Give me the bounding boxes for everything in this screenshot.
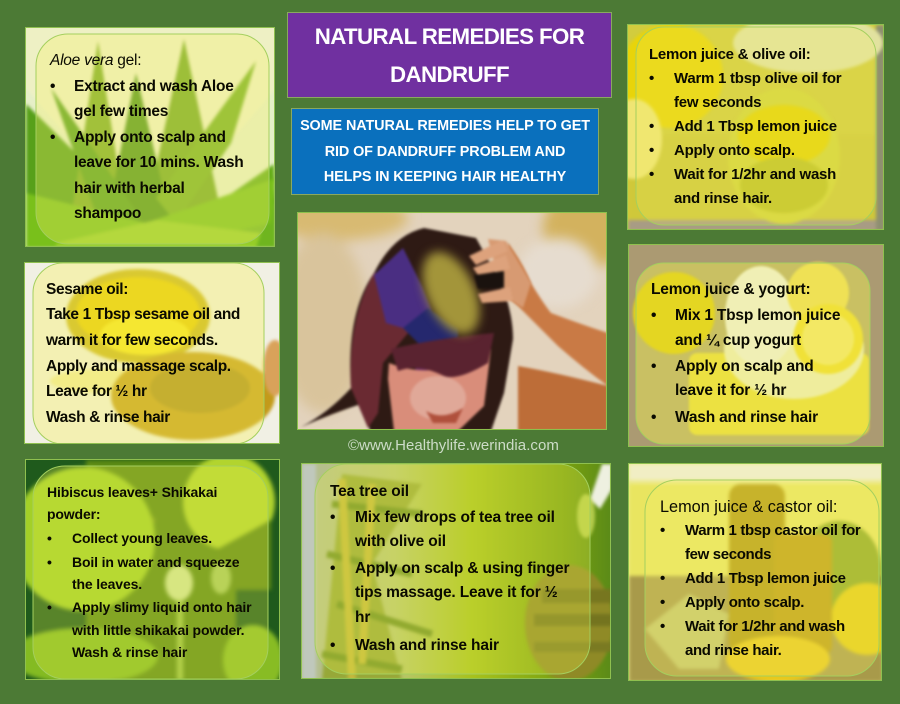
panel: sesame oil: Wash & rinse hair — [46, 409, 170, 426]
panel: hibiscus leaves and shikakai powder: the leaves. — [72, 576, 142, 592]
panel: lemon juice and yogurt: Mix 1 Tbsp lemon juice — [675, 307, 840, 324]
panel: lemon juice and yogurt: • — [651, 307, 656, 324]
subtitle callout: HELPS IN KEEPING HAIR HEALTHY — [324, 169, 566, 185]
panel: lemon juice and castor oil: • — [660, 570, 665, 587]
panel: tea tree oil: Tea tree oil — [330, 483, 409, 500]
panel: hibiscus leaves and shikakai powder: Apply slimy liquid onto hair — [72, 599, 251, 615]
panel: tea tree oil: Mix few drops of tea tree oil — [355, 509, 555, 526]
panel: hibiscus leaves and shikakai powder — [25, 459, 280, 680]
panel: lemon juice and yogurt: • — [651, 358, 656, 375]
panel: lemon juice and olive oil: Wait for 1/2hr and wash — [674, 166, 836, 183]
panel: hibiscus leaves and shikakai powder: Hibiscus leaves+ Shikakai — [47, 484, 217, 500]
photo: woman scratching scalp — [297, 212, 607, 430]
panel: lemon juice and castor oil: • — [660, 618, 665, 635]
photo credit: ©www.Healthylife.werindia.com — [348, 437, 559, 454]
panel: lemon juice and castor oil: • — [660, 594, 665, 611]
panel: lemon juice and castor oil: few seconds — [685, 546, 771, 563]
panel: sesame oil: warm it for few seconds. — [46, 332, 218, 349]
panel: sesame oil: Take 1 Tbsp sesame oil and — [46, 306, 240, 323]
panel: lemon juice and olive oil: • — [649, 142, 654, 159]
panel: aloe vera gel: leave for 10 mins. Wash — [74, 154, 243, 171]
panel: lemon juice and castor oil: and rinse hair. — [685, 642, 781, 659]
subtitle callout — [291, 108, 599, 195]
panel: aloe vera gel — [25, 27, 275, 247]
panel: tea tree oil: with olive oil — [355, 533, 446, 550]
panel: lemon juice and yogurt: • — [651, 409, 656, 426]
panel: lemon juice and olive oil: • — [649, 70, 654, 87]
panel: lemon juice and yogurt: Wash and rinse hair — [675, 409, 818, 426]
panel: lemon juice and olive oil: and rinse hair. — [674, 190, 772, 207]
panel: sesame oil: Apply and massage scalp. — [46, 358, 231, 375]
panel: lemon juice and castor oil: Warm 1 tbsp castor oil for — [685, 522, 860, 539]
panel: tea tree oil: Apply on scalp & using finger — [355, 560, 569, 577]
subtitle callout: RID OF DANDRUFF PROBLEM AND — [325, 144, 565, 160]
panel: hibiscus leaves and shikakai powder: Wash & rinse hair — [72, 644, 187, 660]
panel: lemon juice and castor oil: Apply onto scalp. — [685, 594, 804, 611]
panel: tea tree oil — [301, 463, 611, 679]
panel: hibiscus leaves and shikakai powder: • — [47, 599, 52, 615]
panel: lemon juice and castor oil: Add 1 Tbsp lemon juice — [685, 570, 846, 587]
panel: aloe vera gel: Extract and wash Aloe — [74, 78, 234, 95]
panel: tea tree oil: • — [330, 560, 335, 577]
panel: aloe vera gel: gel few times — [74, 103, 168, 120]
panel: tea tree oil: Wash and rinse hair — [355, 637, 499, 654]
panel: lemon juice and olive oil: • — [649, 118, 654, 135]
panel: sesame oil: Leave for ½ hr — [46, 383, 147, 400]
panel: lemon juice and olive oil: Lemon juice & olive oil: — [649, 46, 811, 63]
panel: hibiscus leaves and shikakai powder: with little shikakai powder. — [72, 622, 244, 638]
title: DANDRUFF — [390, 62, 509, 87]
panel: aloe vera gel: • — [50, 129, 55, 146]
panel: lemon juice and olive oil: Warm 1 tbsp olive oil for — [674, 70, 841, 87]
panel: aloe vera gel: hair with herbal — [74, 180, 185, 197]
panel: hibiscus leaves and shikakai powder: Boil in water and squeeze — [72, 554, 239, 570]
panel: hibiscus leaves and shikakai powder: Collect young leaves. — [72, 530, 212, 546]
panel: lemon juice and yogurt — [628, 244, 884, 447]
panel: lemon juice and yogurt: leave it for ½ hr — [675, 382, 786, 399]
panel: lemon juice and yogurt: Lemon juice & yogurt: — [651, 281, 810, 298]
panel: sesame oil — [24, 262, 280, 444]
title: NATURAL REMEDIES FOR — [315, 24, 584, 49]
panel: lemon juice and castor oil: • — [660, 522, 665, 539]
panel: lemon juice and olive oil: few seconds — [674, 94, 761, 111]
panel: tea tree oil: tips massage. Leave it for ½ — [355, 584, 558, 601]
panel: lemon juice and castor oil: Lemon juice & castor oil: — [660, 498, 837, 516]
panel: lemon juice and olive oil: • — [649, 166, 654, 183]
title — [287, 12, 612, 98]
panel: hibiscus leaves and shikakai powder: • — [47, 554, 52, 570]
panel: tea tree oil: hr — [355, 609, 370, 626]
panel: tea tree oil: • — [330, 637, 335, 654]
panel: lemon juice and olive oil: Add 1 Tbsp lemon juice — [674, 118, 837, 135]
panel: hibiscus leaves and shikakai powder: powder: — [47, 506, 100, 522]
panel: hibiscus leaves and shikakai powder: • — [47, 530, 52, 546]
panel: lemon juice and olive oil: Apply onto scalp. — [674, 142, 795, 159]
panel: aloe vera gel: Apply onto scalp and — [74, 129, 226, 146]
panel: lemon juice and castor oil — [628, 463, 882, 681]
panel: lemon juice and castor oil: Wait for 1/2hr and wash — [685, 618, 845, 635]
panel: aloe vera gel: • — [50, 78, 55, 95]
panel: aloe vera gel: Aloe vera gel: — [50, 52, 141, 69]
panel: lemon juice and yogurt: Apply on scalp and — [675, 358, 814, 375]
panel: sesame oil: Sesame oil: — [46, 281, 128, 298]
panel: aloe vera gel: shampoo — [74, 205, 141, 222]
panel: lemon juice and olive oil — [627, 24, 884, 230]
panel: lemon juice and yogurt: and ¼ cup yogurt — [675, 332, 801, 349]
panel: tea tree oil: • — [330, 509, 335, 526]
subtitle callout: SOME NATURAL REMEDIES HELP TO GET — [300, 118, 590, 134]
